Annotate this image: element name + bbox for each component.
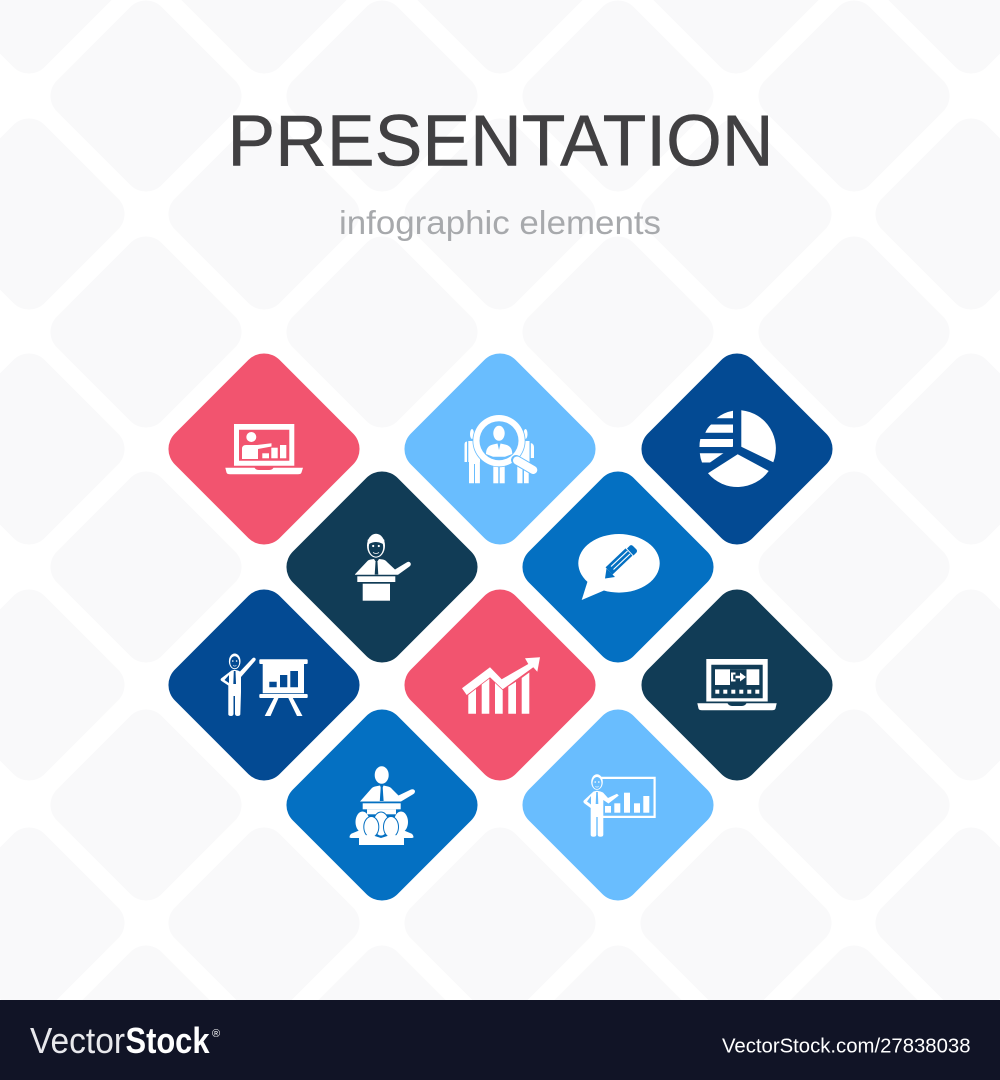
footer logo: ®	[212, 1028, 220, 1040]
icon: speech bubble with pencil	[578, 534, 660, 600]
icon: magnifier over team	[464, 414, 534, 483]
footer image id: VectorStock.com/27838038	[722, 1036, 970, 1058]
icon: presenter with bar board	[583, 774, 656, 837]
panel: people search	[395, 344, 605, 554]
panel: speaker with audience	[277, 700, 487, 910]
panel: growth chart	[395, 580, 605, 790]
icon: speaker at lectern	[355, 534, 411, 601]
subtitle: infographic elements	[339, 204, 661, 241]
icon: speaker with audience	[350, 766, 415, 845]
panel: speaker at lectern	[277, 462, 487, 672]
panel: presenter with bar board	[513, 700, 723, 910]
title: PRESENTATION	[228, 102, 774, 182]
icon: laptop with slide arrow	[697, 659, 777, 710]
icon: laptop with presenter	[225, 424, 303, 474]
panel: laptop presentation	[159, 344, 369, 554]
footer logo: Stock	[126, 1020, 210, 1061]
panel: presenter with flip chart	[159, 580, 369, 790]
icon: presenter with flip chart	[221, 654, 308, 716]
panel: speech bubble with pencil	[513, 462, 723, 672]
panel: pie chart	[642, 354, 832, 544]
footer logo: Vector	[30, 1020, 125, 1061]
icon: rising bar chart with arrow	[462, 657, 540, 714]
icon: pie chart	[699, 410, 776, 487]
panel: laptop with slides	[632, 580, 842, 790]
footer bar	[0, 1000, 1000, 1080]
